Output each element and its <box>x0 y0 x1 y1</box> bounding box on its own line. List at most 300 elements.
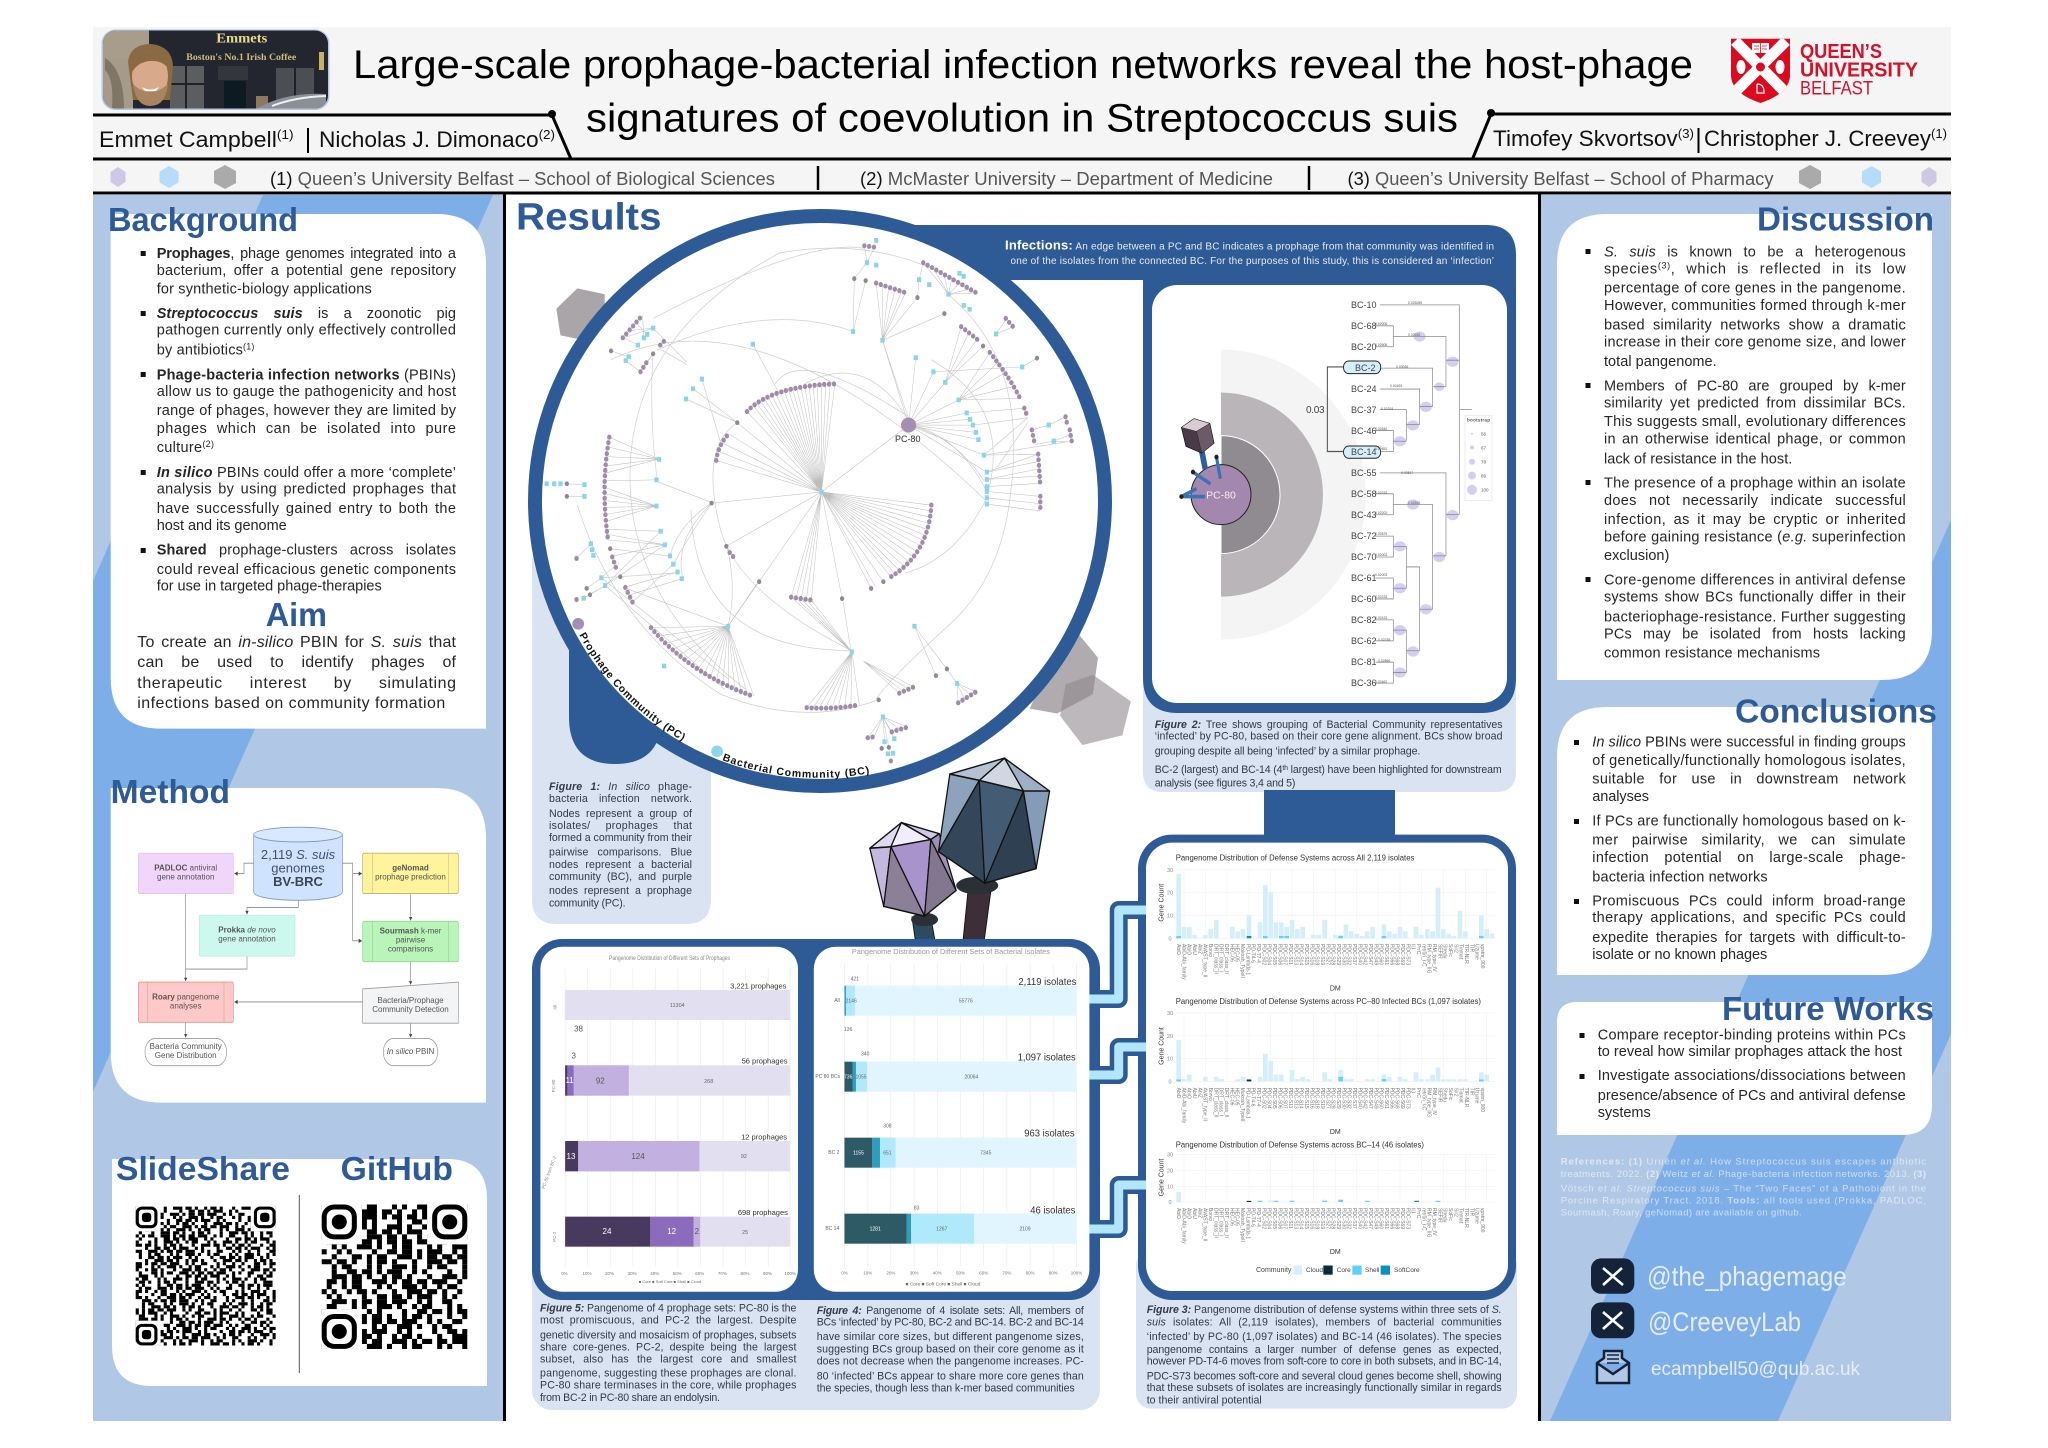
x-axis labels: chart 3: RM_type_IIG <box>1426 1208 1432 1238</box>
references: References: (1) Uruén et al. How Streptococcus suis escapes antibiotic <box>1561 1157 1926 1168</box>
logo: Queen's University Belfast <box>1731 39 1919 103</box>
chart: figure 5 prophage pangenome: PC-2 <box>552 1231 557 1242</box>
caption: figure 3 <box>1147 1304 1502 1406</box>
chart: figure 4 isolate pangenome: 963 isolates <box>1024 1129 1075 1140</box>
title: Large-scale prophage-bacterial infection networks reveal the host-phage <box>353 43 1693 87</box>
tree labels: BC-82 <box>1351 615 1377 625</box>
panel: discussion <box>1557 201 1934 680</box>
heading: slideshare: SlideShare <box>116 1150 290 1187</box>
chart: figure 4 isolate pangenome: 83 <box>914 1206 920 1212</box>
infections text: one of the isolates from the connected BC. For the purposes of this study, this is considered an ‘infection’ <box>1010 256 1494 267</box>
x-axis labels: chart 3: SoFic <box>1447 1208 1453 1221</box>
chart axis labels: 0 <box>1168 1079 1172 1085</box>
panel: left column <box>93 195 503 1421</box>
x-axis labels: chart 2: PDC-S04 <box>1266 1088 1272 1109</box>
bullet list: discussion: exclusion) <box>1604 548 1669 564</box>
chart: figure 4 isolate pangenome: 651 <box>883 1150 892 1156</box>
x-axis labels: chart 2: HEC-05 <box>1234 1088 1240 1106</box>
x-axis labels: chart 1: PDC-S68 <box>1394 944 1400 965</box>
caption panel: figure 1: isolates/ prophages that <box>549 820 692 832</box>
caption: figure 5: from BC-2 in PC-80 share an endolysin. <box>540 1392 720 1404</box>
x-axis labels: chart 1: PDC-S32 <box>1346 944 1352 965</box>
x-axis labels: chart 2: PDC-S37 <box>1351 1088 1357 1109</box>
x-axis labels: chart 2: PDC-S16 <box>1308 1088 1314 1109</box>
chart: figure 4 isolate pangenome: 55776 <box>959 998 973 1004</box>
x-axis labels: chart 1: AVAST_type_II <box>1202 944 1208 977</box>
bullet list: discussion: common resistance mechanisms <box>1604 646 1820 662</box>
tree labels <box>1351 300 1377 688</box>
x-axis labels: chart 3: PDC-S27 <box>1324 1208 1330 1229</box>
flowchart <box>138 827 458 1066</box>
network: circular frame and infection network <box>528 209 1112 793</box>
aim text <box>137 634 457 712</box>
caption: figure 5: Figure 5: Pangenome of 4 prophage sets: PC-80 is the <box>540 1303 796 1315</box>
chart axis labels: DM <box>1330 986 1341 993</box>
x-axis labels: chart 3: PDC-S18 <box>1314 1208 1320 1229</box>
bullet list: discussion: (3) <box>1658 260 1670 270</box>
chart: figure 5 prophage pangenome: 92 <box>741 1154 747 1160</box>
caption panel: figure 1: community (PC). <box>549 898 626 910</box>
caption: figure 4: BCs ‘infected’ by PC-80, BC-2 and BC-14. BC-2 and BC-14 <box>817 1317 1084 1329</box>
x-axis labels: chart 2: Mokosh_TypeII <box>1239 1088 1245 1122</box>
x-axis labels: chart 2: IIJ <box>1410 1088 1416 1093</box>
bullet list: background: for use in targeted phage-therapies <box>157 579 382 595</box>
x-axis labels: chart 2: PDC-S06 <box>1276 1088 1282 1109</box>
caption: figure 3: pangenome contains a larger number of defense genes as expected, <box>1147 1344 1502 1356</box>
legend: community: Community <box>1256 1267 1292 1274</box>
x-axis labels: chart 2: HEC-06 <box>1228 1088 1234 1106</box>
caption: figure 4: suggesting BCs group based on their core genome as it <box>817 1344 1084 1356</box>
bullet list: discussion: Members of PC-80 are grouped by k-mer <box>1604 378 1906 394</box>
aim text: therapeutic interest by simulating <box>137 675 456 692</box>
bullet list: discussion <box>1586 245 1906 662</box>
title: signatures of coevolution in Streptococcus suis <box>586 96 1458 140</box>
tree labels: BC-81 <box>1351 657 1377 667</box>
x-axis labels: chart 2: SoFic <box>1447 1088 1453 1101</box>
title <box>353 43 1693 140</box>
network label: PC-80: PC-80 <box>895 434 920 444</box>
tree branch length labels: 0.02517 <box>1401 471 1413 475</box>
bullet list: discussion: total pangenome. <box>1604 354 1717 370</box>
chart axis labels: DM <box>1330 1249 1341 1256</box>
bullet list: background: bacterium, offer a potential gene repository <box>157 263 457 279</box>
network nodes: bacterial communities <box>547 240 1054 754</box>
chart axis labels: 0 <box>1168 936 1172 942</box>
x-axis labels: chart 1: PDC-S14 <box>1298 944 1304 965</box>
x-axis labels: chart 3: PDC-S07 <box>1282 1208 1288 1229</box>
flowchart: gene annotation <box>157 873 214 882</box>
panel: method card <box>111 773 486 1103</box>
bullet list: background: range of phages, however they are limited by <box>157 403 457 419</box>
tree branch length labels <box>1375 301 1422 684</box>
x-axis labels: chart 2: PDC-S14 <box>1298 1088 1304 1109</box>
chart titles: Pangenome Distribution of Defense Systems across All 2,119 isolates <box>1176 854 1414 863</box>
x-axis labels: chart 2: AbiO <box>1186 1088 1192 1099</box>
flowchart: Prokka de novo <box>218 926 276 935</box>
chart: figure 4 isolate pangenome: ■ Core ■ Soft Core ■ Shell ■ Cloud <box>906 1282 981 1288</box>
bullet list: conclusions: analyses <box>1592 789 1649 805</box>
x-axis labels: chart 2: PDC-S60 <box>1378 1088 1384 1109</box>
caption: figure 2 <box>1155 719 1503 789</box>
chart: figure 5 prophage pangenome: 30% <box>628 1271 637 1276</box>
x-axis labels: chart 2: AbiD <box>1175 1088 1181 1099</box>
caption: figure 3: suis isolates: All (2,119 isolates), members of bacterial communities <box>1147 1317 1502 1329</box>
bullet list: future works: to reveal how similar prophages attack the host <box>1598 1044 1902 1060</box>
x-axis labels: chart 2: Borvo <box>1207 1088 1213 1101</box>
x-axis labels: chart 1: PDC-S37 <box>1351 944 1357 965</box>
x-axis labels: chart 1: PDC-S15 <box>1303 944 1309 965</box>
caption: figure 5: most promiscuous, and PC-2 the largest. Despite <box>540 1314 796 1326</box>
bullet list: future works: presence/absence of PCs and antiviral defense <box>1598 1088 1906 1104</box>
panel: conclusions <box>1557 692 1937 975</box>
network fans <box>567 246 1072 747</box>
decorative hexagons <box>110 165 1936 189</box>
bullet list: discussion: percentage of core genes in the pangenome. <box>1604 281 1906 297</box>
x-axis labels: chart 1: PDC-S05 <box>1271 944 1277 965</box>
chart: figure 5 prophage pangenome: 38 <box>574 1025 583 1034</box>
x-axis labels: chart 1: IIJ <box>1410 944 1416 950</box>
contact: CreeveyLab: @CreeveyLab <box>1648 1307 1801 1337</box>
chart: figure 4 isolate pangenome: 10% <box>863 1271 872 1276</box>
x-axis labels: chart 3: PD-T7-4 <box>1255 1208 1261 1227</box>
x-axis labels: chart 1: PD-T7-4 <box>1255 944 1261 963</box>
x-axis labels: chart 1: PDC-S49 <box>1372 944 1378 965</box>
bullet list: discussion: lack of resistance in the host. <box>1604 451 1792 467</box>
author photo <box>102 30 330 110</box>
tree branch length labels: 0.02639 <box>1408 501 1420 505</box>
chart axis labels: 20 <box>1167 890 1173 896</box>
tree labels: BC-72 <box>1351 531 1377 541</box>
flowchart: PADLOC antiviral <box>154 864 217 873</box>
x-axis labels: chart 3: PDC-S68 <box>1394 1208 1400 1229</box>
bullet list: background: host and its genome <box>157 518 287 534</box>
heading: results: Results <box>516 197 662 239</box>
x-axis labels: chart 2: PrrC <box>1415 1088 1421 1098</box>
logo: Queen's University Belfast: BELFAST <box>1800 78 1873 100</box>
chart: figure 2 PC-80 semicircles and tree <box>1181 300 1492 688</box>
x-axis labels: chart 3: PDC-S40 <box>1356 1208 1362 1229</box>
x-axis labels: chart 1: AbiD-Abi_family <box>1180 944 1186 980</box>
chart axis labels <box>1158 868 1341 1256</box>
flowchart: pairwise <box>396 936 426 945</box>
chart: figure 5 prophage pangenome: 3 <box>571 1052 576 1061</box>
caption panel: figure 1 <box>532 558 711 924</box>
x-axis labels: chart 1: PDC-S07 <box>1282 944 1288 965</box>
flowchart: comparisons <box>388 945 433 954</box>
x-axis labels: chart 3: PDC-S66 <box>1388 1208 1394 1229</box>
x-axis labels: chart 1: PDC-S29 <box>1335 944 1341 965</box>
tree branch length labels: 0.02002 <box>1375 553 1387 557</box>
heading: method: Method <box>111 773 230 810</box>
author photo: Emmets <box>216 32 268 47</box>
logo: Queen's University Belfast: UNIVERSITY <box>1800 60 1919 82</box>
chart axis labels: Gene Count <box>1158 1027 1166 1065</box>
legend: community <box>1256 1267 1420 1274</box>
x-axis labels: chart 1: PDC-S40 <box>1356 944 1362 965</box>
caption: figure 3: that these subsets of isolates are increasingly functionally similar in regards <box>1147 1382 1502 1394</box>
chart: figure 4 isolate pangenome: 100% <box>1071 1271 1082 1276</box>
bullet list: future works: Compare receptor-binding proteins within PCs <box>1598 1027 1906 1043</box>
emblems on shield <box>1736 43 1784 93</box>
contact: the_phagemage: @the_phagemage <box>1647 1262 1847 1292</box>
bullet list: background: Streptococcus suis is a zoonotic pig <box>157 306 456 322</box>
chart: figure 5 prophage pangenome <box>540 947 798 1292</box>
legend: bootstrap: 67 <box>1481 446 1487 450</box>
right author tab <box>1472 109 1951 159</box>
heading: conclusions: Conclusions <box>1735 692 1937 730</box>
x-axis labels: chart 1: DRT_class_I <box>1218 944 1224 973</box>
header band <box>93 27 1951 193</box>
flowchart: BV-BRC <box>273 874 324 889</box>
caption: figure 4 <box>817 1305 1084 1394</box>
x-axis labels: chart 3: PrrC <box>1415 1208 1421 1219</box>
x-axis labels: chart 3: HEC-06 <box>1228 1208 1234 1226</box>
caption: figure 3: to their antiviral potential <box>1147 1394 1262 1406</box>
bullet list: background: pathogen currently only effectively controlled <box>157 323 456 339</box>
caption: figure 2: grouping despite all being ‘infected’ by a similar prophage. <box>1155 745 1420 757</box>
x-axis labels: chart 3: PDC-S11 <box>1287 1208 1293 1229</box>
x-axis labels: chart 3: PDC-S37 <box>1351 1208 1357 1229</box>
x-axis labels: chart 1: PDC-S47 <box>1367 944 1373 965</box>
x-axis labels: chart 3: Uzume <box>1474 1208 1480 1224</box>
legend: community: SoftCore <box>1394 1267 1420 1274</box>
caption: figure 5: PC-80 share terminases in the core, while prophages <box>540 1380 796 1392</box>
chart axis labels: DM <box>1330 1129 1341 1136</box>
tree labels: BC-70 <box>1351 552 1377 562</box>
x-axis labels: chart 3: PDC-S04 <box>1266 1208 1272 1229</box>
chart: figure 5 prophage pangenome: 80% <box>740 1271 750 1276</box>
bullet list: discussion: species <box>1604 261 1657 277</box>
chart: figure 4 isolate pangenome: 20064 <box>964 1074 979 1080</box>
chart: figure 5 prophage pangenome: 50% <box>673 1271 682 1276</box>
x-axis labels: chart 3: AVAST_type_II <box>1202 1208 1208 1241</box>
x-axis labels: chart 3: PDC-S19 <box>1319 1208 1325 1229</box>
icon: small phage <box>1181 419 1220 497</box>
bullet list: discussion: , which is reflected in its low <box>1671 261 1906 277</box>
bullet list: background: allow us to gauge the pathogenicity and host <box>157 384 456 400</box>
chart axis labels: 30 <box>1167 1011 1173 1017</box>
author photo: Boston's No.1 Irish Coffee <box>186 53 296 63</box>
affiliations <box>270 166 1774 190</box>
chart: figure 4 isolate pangenome: PC 80 BCs <box>815 1074 841 1080</box>
heading: discussion: Discussion <box>1757 201 1934 238</box>
chart: figure 5 prophage pangenome: 268 <box>704 1079 713 1085</box>
x-axis labels: chart 1: DRT_class_II <box>1223 944 1229 974</box>
decorative hexagons behind network <box>556 288 1131 745</box>
network label: bacterial community: Bacterial Community (BC) <box>722 754 869 780</box>
x-axis labels: chart 3: Tiamat <box>1458 1208 1464 1224</box>
x-axis labels: chart 3: PDC-S60 <box>1378 1208 1384 1229</box>
bullet list: background: In silico PBINs could offer a more ‘complete’ <box>157 465 456 481</box>
affiliations: (3) Queen’s University Belfast – School of Pharmacy <box>1348 169 1774 189</box>
caption panel: figure 1: bacteria infection network. <box>549 793 692 805</box>
bar charts <box>1176 869 1495 1275</box>
flowchart: Gene Distribution <box>155 1051 217 1060</box>
x-axis labels: chart 2: PDC-S05 <box>1271 1088 1277 1109</box>
caption: figure 2: th <box>1282 765 1288 772</box>
caption: figure 4: does not decrease when the pangenome increases. PC- <box>817 1356 1084 1368</box>
x-axis labels: chart 2: DRT_class_II <box>1223 1088 1229 1118</box>
chart: figure 4 isolate pangenome: 2,119 isolates <box>1018 977 1076 988</box>
x-axis labels: chart 2: retron_I-C <box>1420 1088 1426 1110</box>
tree branch length labels: 0.02232 <box>1375 491 1387 495</box>
x-axis labels: chart 3: PDC-S02 <box>1260 1208 1266 1229</box>
caption: figure 4: Figure 4: Pangenome of 4 isolate sets: All, members of <box>817 1305 1084 1317</box>
tree branch length labels: 0.02006 <box>1375 322 1387 326</box>
right author tab: Christopher J. Creevey <box>1704 126 1929 151</box>
heading: aim: Aim <box>266 596 327 633</box>
x-axis labels: chart 3: PDC-S47 <box>1367 1208 1373 1229</box>
x-axis labels: chart 1: Borvo <box>1207 944 1213 957</box>
x-axis labels: chart 1: AbiZ <box>1196 944 1202 954</box>
x-axis labels: chart 1: Uzume <box>1474 944 1480 960</box>
legend: community: Core <box>1337 1267 1351 1274</box>
chart: figure 4 isolate pangenome: Pangenome Distribution of Different Sets of Bacterial Isolates <box>852 947 1050 956</box>
x-axis labels: chart 1: AbiU <box>1191 944 1197 955</box>
chart: figure 5 prophage pangenome: 25 <box>742 1230 748 1236</box>
x-axis labels: chart 2: PDC-S29 <box>1335 1088 1341 1109</box>
x-axis labels: chart 2: TIR <box>1468 1088 1474 1096</box>
references: Vötsch et al. Streptococcus suis – The “Two Faces” of a Pathobiont in the <box>1561 1183 1926 1194</box>
x-axis labels: chart 2: PDC-S19 <box>1319 1088 1325 1109</box>
x-axis labels: chart 3: PDC-S30 <box>1340 1208 1346 1229</box>
x-axis labels: chart 1: retron_I-C <box>1420 944 1426 967</box>
x-axis labels: chart 3: AbiZ <box>1196 1208 1202 1218</box>
chart: figure 4 isolate pangenome: 20% <box>886 1271 895 1276</box>
x-axis labels: chart 1: PDC-S73 <box>1404 944 1410 965</box>
chart axis labels: 0 <box>1168 1200 1172 1206</box>
x-axis labels: chart 1: PDC-S69 <box>1399 944 1405 965</box>
chart axis labels: 20 <box>1167 1034 1173 1040</box>
chart: figure 2 PC-80 semicircles and tree: 0.03 <box>1306 405 1325 416</box>
contact: email <box>1597 1351 1860 1383</box>
x-axis labels: chart 3: retron_I-C <box>1420 1208 1426 1231</box>
chart: figure 5 prophage pangenome: All <box>553 1005 558 1010</box>
chart: figure 4 isolate pangenome: 7345 <box>980 1150 992 1156</box>
x-axis labels: chart 2: PDC-S47 <box>1367 1088 1373 1109</box>
x-axis labels: chart 3: AbiU <box>1191 1208 1197 1219</box>
bullet list: conclusions: If PCs are functionally homologous based on k- <box>1592 813 1906 829</box>
left author tab: Emmet Campbell <box>99 127 268 152</box>
right author tab: (3) <box>1678 126 1694 141</box>
left author tab: Nicholas J. Dimonaco <box>319 127 532 152</box>
bullet list: conclusions: expedite therapies for targets with difficult-to- <box>1592 930 1906 946</box>
bullet list: discussion: However, communities formed through k-mer <box>1604 298 1906 314</box>
tree labels: BC-60 <box>1351 594 1377 604</box>
chart: figure 5 prophage pangenome: PC-80 <box>551 1079 556 1092</box>
tree labels: BC-36 <box>1351 678 1377 688</box>
x-axis labels: chart 2: PDC-S68 <box>1394 1088 1400 1109</box>
caption panel: figure 1: nodes represent a prophage <box>549 885 692 897</box>
bullet list: background: phages which can be isolated into pure <box>157 421 456 437</box>
x-axis labels: chart 1: Mokosh_TypeII <box>1239 944 1245 978</box>
x-axis labels: chart 2: Sir2 <box>1452 1088 1458 1097</box>
x-axis labels: chart 3: AbiD <box>1175 1208 1181 1219</box>
x-axis labels: chart 2: Uzume <box>1474 1088 1480 1104</box>
chart axis labels: Gene Count <box>1158 884 1166 922</box>
x-axis labels: chart 2: PDC-S73 <box>1404 1088 1410 1109</box>
x-axis labels: chart 1: HEC-05 <box>1234 944 1240 962</box>
bullet list: future works <box>1580 1027 1906 1121</box>
caption: figure 5 <box>540 1303 796 1404</box>
heading: github: GitHub <box>341 1150 453 1187</box>
caption: figure 2: analysis (see figures 3,4 and 5) <box>1155 777 1295 789</box>
chart: figure 4 isolate pangenome: 40% <box>933 1271 942 1276</box>
tree labels: BC-24 <box>1351 384 1377 394</box>
logo: Queen's University Belfast: QUEEN’S <box>1800 40 1882 63</box>
bullet list: background: analysis by using predicted prophages that <box>157 482 456 498</box>
bullet list: conclusions: of genetically/functionally homologous isolates, <box>1592 753 1906 769</box>
chart axis labels: Gene Count <box>1158 1159 1166 1196</box>
chart: figure 5 prophage pangenome: 2 <box>695 1227 700 1236</box>
bullet list: discussion: increase in their core genome size, and lower <box>1604 335 1906 351</box>
chart: figure 4 isolate pangenome: 0% <box>841 1271 848 1276</box>
affiliations: (1) Queen’s University Belfast – School of Biological Sciences <box>270 169 775 189</box>
bullet list: discussion: Core-genome differences in antiviral defense <box>1604 572 1906 588</box>
x-axis labels: chart 1: PDC-S60 <box>1378 944 1384 965</box>
aim text: To create an in-silico PBIN for S. suis that <box>137 634 457 651</box>
tree branch length labels: 0.026289 <box>1408 301 1422 305</box>
legend: bootstrap: 100 <box>1481 488 1489 492</box>
x-axis labels: chart 3: Shedu <box>1442 1208 1448 1223</box>
x-axis labels: chart 2: PD-T4-6 <box>1250 1088 1256 1107</box>
caption: figure 4: 80 ‘infected’ BCs appear to share more core genes than <box>817 1370 1084 1382</box>
x-axis labels: chart 3: PD-T4-6 <box>1250 1208 1256 1227</box>
caption: figure 2: Figure 2: Tree shows grouping of Bacterial Community representatives <box>1155 719 1502 731</box>
bullet list: discussion: infection, as it may be cryptic or inherited <box>1604 512 1906 528</box>
chart: figure 5 prophage pangenome: 0% <box>561 1271 568 1276</box>
caption: figure 5: share core-genes. PC-2, despite being the largest <box>540 1342 796 1354</box>
panel: infections header and figure 2 frame <box>850 225 1516 792</box>
x-axis labels: chart 1: Shedu <box>1442 944 1448 959</box>
x-axis labels: chart 2: PDC-S13 <box>1292 1088 1298 1109</box>
tree labels: BC-62 <box>1351 636 1377 646</box>
chart: figure 4 isolate pangenome: 46 isolates <box>1030 1205 1075 1216</box>
tree branch length labels: 0.02875 <box>1375 532 1387 536</box>
caption: figure 5: pangenome, suggesting these prophages are clonal. <box>540 1368 796 1380</box>
x-axis labels: chart 1: PDC-S66 <box>1388 944 1394 965</box>
x-axis labels: chart 1: RM_type_IIG <box>1426 944 1432 974</box>
bullet list: conclusions: bacteria infection networks <box>1592 869 1768 885</box>
x-axis labels: chart 1: TIR-NLR <box>1463 944 1469 964</box>
chart: figure 5 prophage pangenome: 90% <box>763 1271 772 1276</box>
chart: figure 4 isolate pangenome: 1155 <box>853 1150 864 1156</box>
tree branch length labels: 0.02639 <box>1408 333 1420 337</box>
caption: figure 5: subset, also has the largest core and smallest <box>540 1354 796 1366</box>
caption: figure 4: have similar core sizes, but different pangenome sizes, <box>817 1331 1084 1343</box>
bullet list: discussion: This suggests small, evolutionary differences <box>1604 414 1906 430</box>
x-axis labels: chart 3: DRT_class_I <box>1218 1208 1224 1237</box>
caption: figure 3: PDC-S73 becomes soft-core and several cloud genes become shell, showing <box>1147 1371 1502 1383</box>
caption panel: figure 1: community (BC), and purple <box>549 871 692 883</box>
bullet list: background: culture <box>157 440 202 456</box>
caption: figure 2: largest) have been highlighted for downstream <box>1288 764 1502 776</box>
tree branch length labels: 0.02235 <box>1378 638 1390 642</box>
x-axis labels: chart 2: vpstm_900 <box>1479 1088 1485 1112</box>
x-axis labels: chart 2: PDC-S30 <box>1340 1088 1346 1109</box>
chart: figure 5 prophage pangenome: 11304 <box>670 1003 685 1009</box>
x-axis labels: chart 3: TIR-NLR <box>1463 1208 1469 1228</box>
chart axis labels: 10 <box>1167 1056 1173 1062</box>
tree branch length labels: 0.02493 <box>1390 384 1402 388</box>
panel: right column <box>1541 195 1951 1421</box>
bullet list: background: by antibiotics <box>157 342 243 358</box>
bullet list: conclusions: suitable for use in downstream network <box>1592 771 1906 787</box>
chart titles: Pangenome Distribution of Defense Systems across PC–80 Infected BCs (1,097 isolates) <box>1176 997 1481 1006</box>
chart: figure 4 isolate pangenome: All <box>834 998 840 1004</box>
heading: future works: Future Works <box>1722 990 1934 1027</box>
flowchart: genomes <box>271 861 325 876</box>
